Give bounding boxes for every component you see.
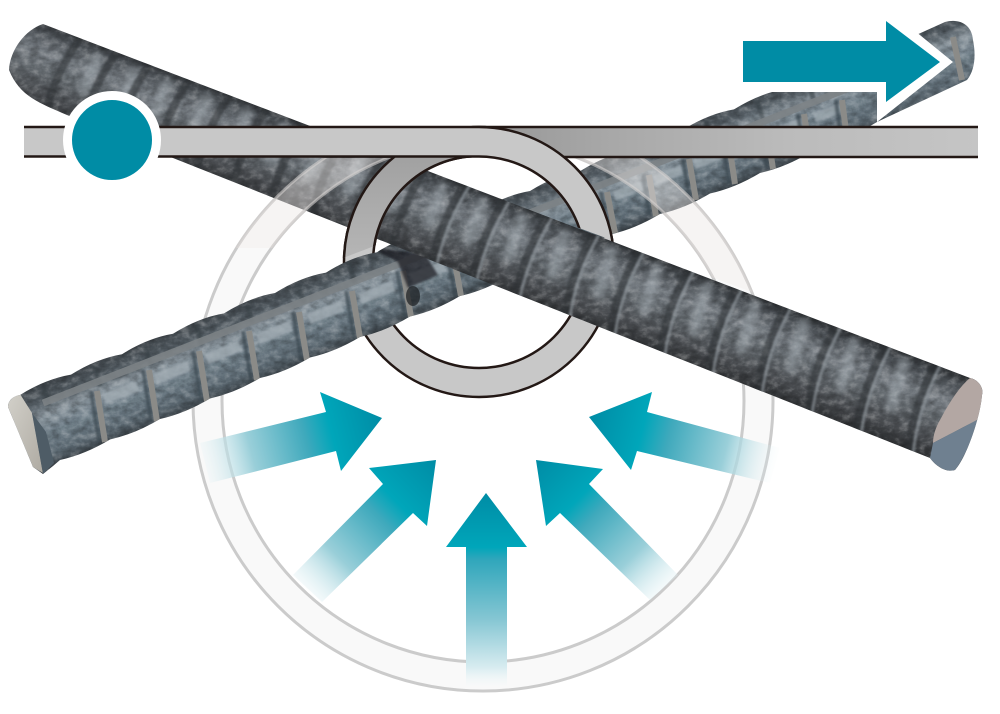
rib highlights bbox=[437, 185, 942, 454]
wire arc outlines bbox=[344, 127, 479, 262]
lower rib shadows bbox=[91, 100, 841, 442]
wire band outlines bbox=[24, 126, 614, 241]
cut end rim bbox=[32, 413, 54, 474]
teal anchor dot bbox=[68, 96, 156, 184]
rebar: upper-left to lower-right bar bbox=[9, 24, 982, 471]
segment highlights bbox=[84, 58, 904, 406]
lower ribs bbox=[97, 37, 962, 442]
contact shadow under crossing bbox=[372, 248, 438, 288]
upper lumps bbox=[42, 92, 817, 407]
teal pull arrow bbox=[743, 21, 940, 102]
corrosion pit bbox=[406, 286, 420, 306]
cut end face bbox=[8, 394, 43, 473]
pressure arrows bbox=[200, 392, 780, 687]
cut end face: upper bbox=[933, 378, 982, 443]
wire loop: upper-left arc bbox=[344, 158, 454, 258]
rebar: lower-left to upper-right bar bbox=[8, 20, 975, 474]
bar body bbox=[9, 24, 982, 471]
bar body bbox=[8, 20, 975, 474]
tile highlights, near end bbox=[104, 260, 460, 399]
arrow: from lower left bbox=[293, 460, 436, 602]
tie wire loop: lower part behind the bars bbox=[344, 127, 614, 397]
arrow: from bottom bbox=[446, 493, 527, 687]
tile highlights, far end bbox=[614, 104, 850, 196]
tie wire: band and loop in front of the bars bbox=[24, 127, 978, 262]
translucent overlay of the pressure ring on the bars bbox=[237, 158, 752, 292]
wire band: left section and right arc bbox=[24, 128, 611, 240]
rib shadows bbox=[47, 38, 937, 452]
arrow: from left bbox=[200, 392, 382, 483]
arrow: from lower right bbox=[536, 460, 678, 600]
wire band: right section bbox=[479, 127, 978, 157]
cut end face: lower bbox=[930, 420, 977, 471]
large translucent pressure ring bbox=[193, 111, 773, 691]
arrow: from right bbox=[589, 392, 780, 483]
longitudinal ridge bbox=[43, 76, 880, 403]
white knock-out around pull arrow bbox=[730, 0, 953, 122]
